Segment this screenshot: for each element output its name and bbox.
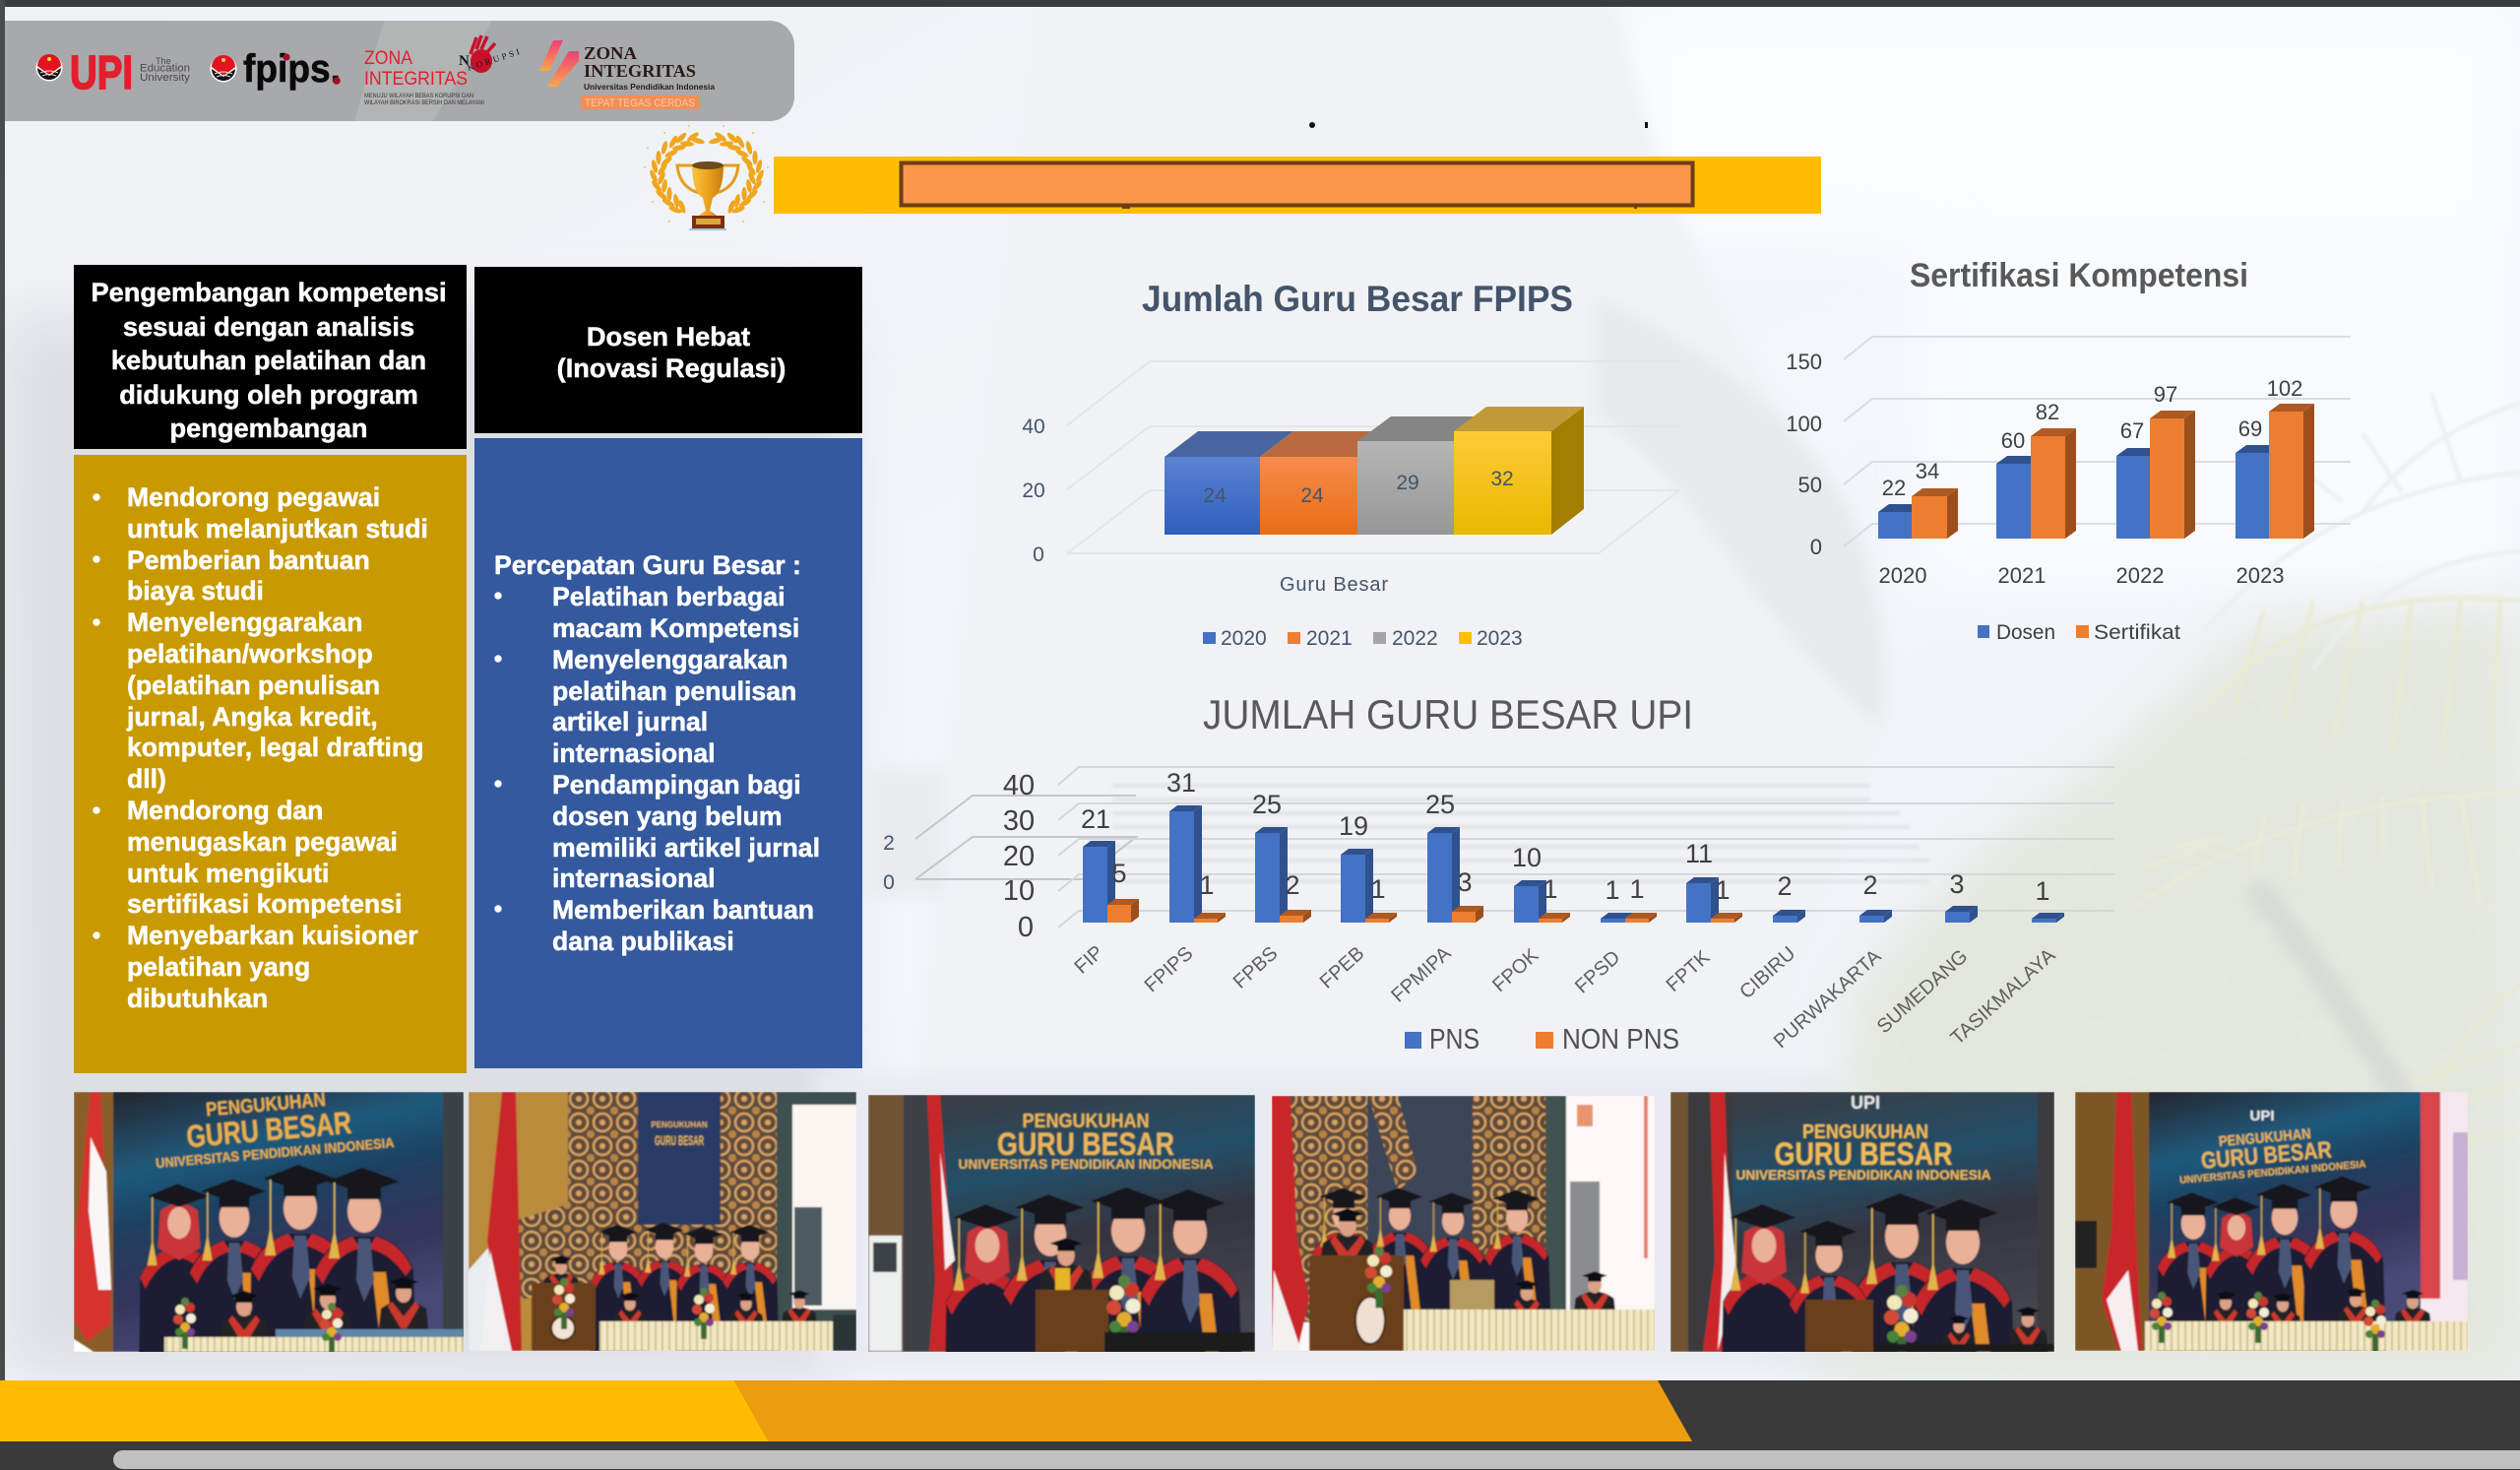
logo: Zona Integritas anti-corruption	[364, 35, 521, 106]
chart: Sertifikasi Kompetensi: 0	[1810, 535, 1822, 559]
bar: 2023	[1454, 407, 1584, 535]
chart: Sertifikasi Kompetensi: 150	[1786, 350, 1822, 374]
data labels: 2	[1777, 871, 1793, 901]
photo 1: inauguration stage with poster	[74, 1089, 464, 1352]
data labels: 1	[2035, 876, 2050, 906]
data labels: 25	[1425, 790, 1455, 819]
category labels: TASIKMALAYA	[1947, 944, 2060, 1050]
chart: Jumlah Guru Besar UPI: 20	[1003, 841, 1035, 872]
bar: 2020: 24	[1203, 484, 1227, 507]
legend: Dosen	[1996, 621, 2055, 644]
photo 6: panel seated at table with poster: UNIVERSITAS PENDIDIKAN INDONESIA	[2179, 1158, 2366, 1186]
data labels: 34	[1916, 459, 1939, 483]
panel: competency development header: kebutuhan pelatihan dan	[111, 345, 426, 375]
chart: Jumlah Guru Besar FPIPS: 20	[1022, 479, 1045, 502]
panel: Percepatan Guru Besar list: dosen yang belum	[552, 801, 782, 831]
category labels: FIP	[1070, 941, 1107, 979]
data labels: 2021	[1998, 563, 2046, 588]
panel: Percepatan Guru Besar list	[474, 438, 862, 1068]
data labels: 97	[2154, 382, 2177, 407]
panel: competency development list: Menyebarkan kuisioner	[127, 921, 418, 950]
photo 6: panel seated at table with poster	[2075, 1092, 2468, 1351]
data labels: 2023	[2236, 563, 2284, 588]
panel: competency development header	[74, 265, 467, 449]
logo: Zona Integritas anti-corruption: WILAYAH BIROKRASI BERSIH DAN MELAYANI	[364, 100, 484, 106]
panel: Percepatan Guru Besar list: macam Kompetensi	[552, 613, 799, 643]
logo: Zona Integritas anti-corruption: N	[459, 53, 470, 69]
chart: Jumlah Guru Besar FPIPS: 0	[1033, 543, 1044, 566]
photo 5: speaker with poster and UPI logo: PENGUKUHAN	[1802, 1121, 1928, 1143]
scrollbar	[113, 1450, 2520, 1469]
chart: Jumlah Guru Besar FPIPS: 40	[1022, 415, 1045, 438]
panel: Percepatan Guru Besar list: dana publikasi	[552, 927, 734, 956]
photo 5: speaker with poster and UPI logo: UPI	[1851, 1093, 1880, 1113]
chart: Jumlah Guru Besar UPI: 0	[1018, 912, 1034, 943]
ghost chart remnant behind Jumlah Guru Besar UPI: 0	[883, 871, 895, 894]
category labels: FPEB	[1316, 942, 1368, 993]
data labels: 10	[1512, 843, 1542, 872]
data labels: 5	[1111, 859, 1127, 888]
panel: Dosen Hebat header: (Inovasi Regulasi)	[557, 352, 786, 383]
logo: Zona Integritas UPI: ZONA	[584, 43, 637, 63]
logo: Zona Integritas UPI: Universitas Pendidikan Indonesia	[584, 83, 716, 92]
category labels: FPMIPA	[1387, 942, 1456, 1007]
logo: fpips: fpips.	[243, 47, 341, 91]
panel: Percepatan Guru Besar list: artikel jurnal	[552, 707, 708, 736]
legend: 2022	[1392, 627, 1438, 650]
panel: Percepatan Guru Besar list: Pendampingan bagi	[552, 770, 801, 799]
bar: 2023: 32	[1490, 468, 1514, 490]
legend: 2020	[1221, 627, 1267, 650]
data labels: 102	[2267, 376, 2302, 401]
data labels: 1	[1715, 875, 1731, 905]
chart: Jumlah Guru Besar UPI: 30	[1003, 805, 1035, 837]
panel: Dosen Hebat header	[474, 267, 862, 433]
category labels: FPOK	[1488, 944, 1544, 996]
legend: NON PNS	[1562, 1024, 1679, 1055]
panel: competency development list: Menyelenggarakan	[127, 607, 362, 637]
data labels: 19	[1339, 811, 1368, 841]
logo: Zona Integritas UPI: TEPAT TEGAS CERDAS	[585, 97, 695, 109]
data labels: 1	[1370, 874, 1386, 904]
photo 5: speaker with poster and UPI logo: GURU BESAR	[1774, 1136, 1953, 1172]
photo 5: speaker with poster and UPI logo: UNIVERSITAS PENDIDIKAN INDONESIA	[1736, 1167, 1990, 1182]
chart: Jumlah Guru Besar UPI: 40	[1003, 770, 1035, 801]
data labels: 11	[1685, 839, 1713, 868]
data labels: 2	[1862, 870, 1878, 900]
ghost chart remnant behind Jumlah Guru Besar UPI: 2	[883, 832, 895, 855]
chart title: Jumlah Guru Besar FPIPS	[1142, 279, 1573, 319]
panel: competency development list: pelatihan/workshop	[127, 639, 373, 669]
panel: Dosen Hebat header: Dosen Hebat	[587, 321, 750, 352]
bars: 2021	[1996, 428, 2076, 539]
data labels: 2020	[1879, 563, 1926, 588]
legend: 2023	[1477, 627, 1523, 650]
panel: competency development header: sesuai dengan analisis	[123, 311, 414, 342]
category labels: FPSD	[1571, 946, 1624, 997]
chart: Jumlah Guru Besar UPI: 10	[1003, 875, 1035, 907]
panel: competency development list: Mendorong pegawai	[127, 482, 380, 512]
panel: competency development list: untuk mengikuti	[127, 859, 329, 888]
panel: competency development list: jurnal, Angka kredit,	[126, 702, 378, 732]
photo 3: speaker at podium with poster: UNIVERSITAS PENDIDIKAN INDONESIA	[959, 1156, 1213, 1172]
panel: competency development header: didukung oleh program	[119, 379, 418, 410]
category labels: FPIPS	[1141, 942, 1197, 996]
logo: UPI	[35, 47, 191, 99]
series: NON PNS bars	[1107, 899, 1742, 923]
panel: Percepatan Guru Besar list: Percepatan Guru Besar :	[494, 550, 801, 580]
data labels: 1	[1543, 874, 1558, 904]
category labels: CIBIRU	[1735, 942, 1799, 1003]
bar: 2021	[1260, 431, 1389, 535]
photo 1: inauguration stage with poster: PENGUKUHAN	[205, 1089, 327, 1121]
panel: Percepatan Guru Besar list: pelatihan penulisan	[552, 676, 796, 706]
legend	[1203, 627, 1523, 650]
photo 6: panel seated at table with poster: UPI	[2249, 1108, 2275, 1124]
photo 4: speaker at podium with batik backdrop	[1272, 1096, 1655, 1351]
logo: Zona Integritas UPI: INTEGRITAS	[584, 61, 696, 81]
panel: competency development list: dll)	[127, 764, 166, 794]
series: PNS bars	[1083, 805, 2064, 923]
legend: PNS	[1429, 1024, 1480, 1055]
panel: Percepatan Guru Besar list: Pelatihan berbagai	[552, 582, 785, 611]
panel: competency development list: menugaskan pegawai	[127, 827, 398, 857]
photo 3: speaker at podium with poster	[868, 1095, 1255, 1352]
data labels: 31	[1166, 768, 1196, 798]
header logo panel	[5, 21, 794, 121]
logo: UPI: The	[156, 56, 171, 66]
panel: Percepatan Guru Besar list: memiliki artikel jurnal	[552, 833, 820, 863]
panel: competency development list: dibutuhkan	[127, 984, 268, 1013]
panel: competency development list: Pemberian bantuan	[127, 545, 370, 575]
logo: Zona Integritas anti-corruption: MENUJU WILAYAH BEBAS KORUPSI DAN	[364, 94, 473, 99]
panel: Percepatan Guru Besar list: internasional	[552, 738, 716, 768]
panel: competency development list: komputer, legal drafting	[127, 733, 423, 762]
panel: competency development list: untuk melanjutkan studi	[127, 514, 428, 543]
logo: UPI: UPI	[70, 47, 133, 99]
data labels: 21	[1081, 804, 1110, 834]
photo 2: wide stage with batik backdrop: GURU BESAR	[655, 1132, 704, 1148]
category labels	[1070, 941, 2060, 1053]
bar: 2022	[1357, 416, 1486, 535]
bar: 2021: 24	[1300, 484, 1324, 507]
logo: UPI: University	[140, 72, 191, 84]
photo 3: speaker at podium with poster: PENGUKUHAN	[1022, 1111, 1150, 1132]
panel: competency development list: (pelatihan penulisan	[127, 671, 380, 700]
photo 6: panel seated at table with poster: PENGUKUHAN	[2218, 1125, 2311, 1150]
data labels: 2	[1285, 870, 1300, 900]
chart: Sertifikasi Kompetensi: 100	[1786, 412, 1822, 436]
bar: 2020	[1165, 431, 1293, 535]
data labels: 69	[2238, 416, 2262, 441]
data labels: 22	[1882, 476, 1906, 500]
data labels: 2022	[2116, 563, 2164, 588]
chart: Jumlah Guru Besar FPIPS	[1022, 279, 1679, 650]
panel: competency development list	[74, 455, 467, 1073]
logo: Zona Integritas anti-corruption: INTEGRITAS	[364, 69, 468, 90]
category labels: PURWAKARTA	[1770, 945, 1886, 1053]
data labels	[1081, 768, 2050, 906]
logo: Zona Integritas anti-corruption: ZONA	[364, 48, 412, 69]
data labels: 1	[1629, 874, 1645, 904]
chart: Sertifikasi Kompetensi: 50	[1798, 473, 1822, 497]
data labels: 60	[2001, 428, 2025, 453]
photo 2: wide stage with batik backdrop	[469, 1092, 856, 1351]
panel: competency development list: biaya studi	[127, 576, 264, 606]
data labels: 25	[1252, 790, 1282, 819]
bars: 2022	[2116, 411, 2195, 539]
panel: competency development list: Mendorong dan	[127, 796, 323, 825]
bars: 2023	[2236, 404, 2314, 539]
icon: trophy with laurel wreath	[644, 125, 769, 230]
footer band	[0, 1380, 2520, 1470]
chart title: JUMLAH GURU BESAR UPI	[1203, 691, 1693, 737]
chart: Sertifikasi Kompetensi	[1786, 257, 2351, 644]
panel: competency development header: Pengembangan kompetensi	[91, 277, 447, 307]
legend: Sertifikat	[2094, 621, 2180, 644]
data labels: 3	[1457, 867, 1473, 897]
data labels: 82	[2036, 400, 2059, 424]
ghost chart remnant behind Jumlah Guru Besar UPI	[883, 796, 1136, 894]
chart title: Sertifikasi Kompetensi	[1910, 257, 2248, 294]
category labels: FPBS	[1229, 942, 1282, 993]
panel: Percepatan Guru Besar list: Memberikan bantuan	[552, 895, 814, 925]
legend	[1405, 1024, 1679, 1055]
logo: Zona Integritas UPI	[539, 40, 716, 109]
photo 6: panel seated at table with poster: GURU BESAR	[2200, 1137, 2333, 1175]
photo 5: speaker with poster and UPI logo	[1670, 1092, 2054, 1352]
title band with hidden text box	[774, 122, 1821, 214]
panel: competency development list: pelatihan yang	[127, 952, 310, 982]
data labels: 3	[1949, 869, 1965, 899]
legend	[1978, 621, 2180, 644]
panel: Percepatan Guru Besar list: internasional	[552, 863, 716, 893]
legend: 2021	[1306, 627, 1353, 650]
data labels: 1	[1605, 875, 1620, 905]
bar: 2022: 29	[1396, 472, 1419, 494]
logo: Zona Integritas anti-corruption: KORUPSI	[467, 46, 521, 73]
panel: competency development list: sertifikasi kompetensi	[127, 889, 402, 919]
category labels: SUMEDANG	[1873, 945, 1972, 1038]
photo 1: inauguration stage with poster: GURU BESAR	[185, 1105, 352, 1154]
data labels: 1	[1199, 870, 1215, 900]
chart: Jumlah Guru Besar FPIPS: Guru Besar	[1280, 574, 1388, 596]
chart: Jumlah Guru Besar UPI	[1003, 691, 2114, 1055]
category labels: FPTK	[1663, 946, 1715, 996]
panel: Percepatan Guru Besar list: Menyelenggarakan	[552, 645, 788, 674]
data labels: 67	[2120, 418, 2144, 443]
data labels	[1879, 376, 2302, 588]
bars: 2020	[1878, 488, 1958, 539]
photo 2: wide stage with batik backdrop: PENGUKUHAN	[651, 1120, 708, 1129]
logo: UPI: Education	[140, 63, 190, 75]
photo 3: speaker at podium with poster: GURU BESAR	[997, 1126, 1174, 1162]
photo 1: inauguration stage with poster: UNIVERSITAS PENDIDIKAN INDONESIA	[156, 1134, 395, 1171]
panel: competency development header: pengembangan	[170, 413, 367, 443]
